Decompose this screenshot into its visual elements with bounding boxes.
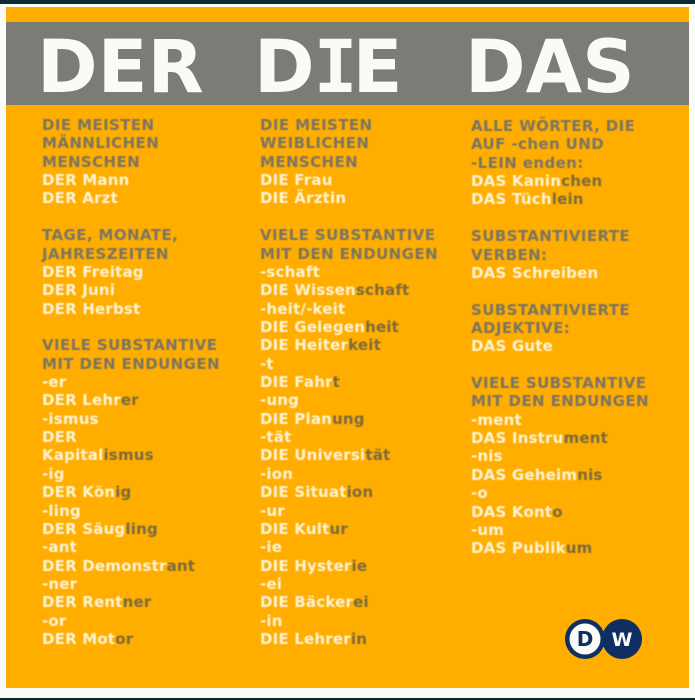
text block: -chen and -lein: [470, 116, 635, 208]
text block: masculine endings: DER: [42, 428, 77, 446]
text block: male people: DIE MEISTEN: [42, 116, 154, 134]
text block: masculine endings: DER Lehrer: [42, 391, 139, 409]
text block: neuter endings: -nis: [471, 447, 503, 465]
text block: female people: DIE Ärztin: [260, 189, 346, 207]
text block: feminine endings: -ur: [260, 502, 285, 520]
text block: days, months, seasons: JAHRESZEITEN: [42, 245, 169, 263]
text block: feminine endings: DIE Situation: [260, 483, 373, 501]
text block: feminine endings: DIE Kultur: [260, 520, 348, 538]
header band: [6, 22, 689, 105]
text block: -chen and -lein: DAS Kaninchen: [471, 172, 602, 190]
title: DAS: DAS: [465, 25, 635, 110]
text block: masculine endings: DER Rentner: [42, 593, 152, 611]
text block: masculine endings: [42, 336, 220, 648]
text block: neuter endings: VIELE SUBSTANTIVE: [471, 374, 646, 392]
text block: feminine endings: DIE Universität: [260, 446, 390, 464]
text block: neuter endings: MIT DEN ENDUNGEN: [471, 392, 649, 410]
text block: masculine endings: -ling: [42, 502, 81, 520]
text block: neuter endings: -o: [471, 484, 488, 502]
icon: DW logo: W: [612, 629, 633, 651]
text block: nominalised adjectives: ADJEKTIVE:: [471, 319, 570, 337]
text block: masculine endings: -ner: [42, 575, 77, 593]
text block: nominalised verbs: DAS Schreiben: [471, 264, 598, 282]
text block: nominalised adjectives: SUBSTANTIVIERTE: [471, 301, 630, 319]
text block: masculine endings: VIELE SUBSTANTIVE: [42, 336, 217, 354]
text block: days, months, seasons: DER Herbst: [42, 300, 140, 318]
text block: masculine endings: -or: [42, 612, 67, 630]
text block: feminine endings: -in: [260, 612, 283, 630]
icon: DW logo: D: [577, 627, 593, 651]
text block: masculine endings: DER König: [42, 483, 132, 501]
text block: days, months, seasons: DER Freitag: [42, 263, 144, 281]
text block: feminine endings: -ie: [260, 538, 282, 556]
text block: male people: MÄNNLICHEN: [42, 134, 159, 152]
panel: DAS column: [470, 116, 649, 557]
text block: nominalised verbs: [470, 227, 630, 282]
icon: DW logo: [565, 619, 642, 659]
text block: feminine endings: -t: [260, 355, 274, 373]
text block: feminine endings: [260, 226, 438, 648]
text block: feminine endings: -ung: [260, 391, 299, 409]
text block: female people: DIE MEISTEN: [260, 116, 372, 134]
text block: feminine endings: VIELE SUBSTANTIVE: [260, 226, 435, 244]
text block: male people: DER Mann: [42, 171, 129, 189]
text block: feminine endings: DIE Bäckerei: [260, 593, 369, 611]
text block: feminine endings: DIE Planung: [260, 410, 365, 428]
text block: feminine endings: -tät: [260, 428, 292, 446]
text block: feminine endings: DIE Wissenschaft: [260, 281, 409, 299]
text block: neuter endings: -ment: [471, 411, 522, 429]
text block: nominalised adjectives: [470, 301, 630, 355]
text block: female people: [260, 116, 372, 207]
text block: days, months, seasons: [40, 226, 178, 318]
text block: feminine endings: MIT DEN ENDUNGEN: [260, 245, 438, 263]
text block: feminine endings: DIE Fahrt: [260, 373, 340, 391]
panel: DIE column: [260, 116, 438, 648]
text block: male people: MENSCHEN: [42, 153, 140, 171]
text block: neuter endings: -um: [471, 521, 504, 539]
text block: feminine endings: DIE Heiterkeit: [260, 336, 381, 354]
text block: feminine endings: -heit/-keit: [260, 300, 345, 318]
text block: feminine endings: -schaft: [260, 263, 320, 281]
text block: feminine endings: DIE Lehrerin: [260, 630, 367, 648]
text block: nominalised verbs: SUBSTANTIVIERTE: [471, 227, 630, 245]
text block: masculine endings: DER Säugling: [42, 520, 158, 538]
text block: female people: DIE Frau: [260, 171, 333, 189]
text block: -chen and -lein: -LEIN enden:: [471, 154, 584, 172]
panel: DER column: [40, 116, 220, 648]
text block: masculine endings: DER Demonstrant: [42, 557, 195, 575]
text block: masculine endings: -er: [42, 373, 66, 391]
text block: neuter endings: [470, 374, 649, 557]
text block: feminine endings: -ei: [260, 575, 282, 593]
title: DER: DER: [37, 25, 204, 110]
bottom dark strip: [0, 698, 695, 700]
text block: -chen and -lein: DAS Tüchlein: [471, 190, 584, 208]
text block: masculine endings: DER Motor: [42, 630, 133, 648]
text block: female people: MENSCHEN: [260, 153, 358, 171]
text block: masculine endings: -ig: [42, 465, 65, 483]
text block: male people: DER Arzt: [42, 189, 118, 207]
text block: neuter endings: DAS Geheimnis: [471, 466, 603, 484]
text block: nominalised verbs: VERBEN:: [471, 246, 547, 264]
text block: nominalised adjectives: DAS Gute: [471, 337, 553, 355]
text block: days, months, seasons: DER Juni: [42, 281, 115, 299]
text block: masculine endings: MIT DEN ENDUNGEN: [42, 355, 220, 373]
text block: neuter endings: DAS Instrument: [471, 429, 608, 447]
text block: male people: [42, 116, 159, 207]
text block: feminine endings: DIE Hysterie: [260, 557, 367, 575]
text block: masculine endings: -ismus: [42, 410, 99, 428]
text block: neuter endings: DAS Konto: [471, 503, 563, 521]
text block: -chen and -lein: ALLE WÖRTER, DIE: [471, 117, 635, 135]
text block: -chen and -lein: AUF -chen UND: [471, 135, 604, 153]
text block: masculine endings: Kapitalismus: [42, 446, 154, 464]
text block: feminine endings: DIE Gelegenheit: [260, 318, 399, 336]
title: DIE: DIE: [254, 25, 402, 110]
text block: days, months, seasons: TAGE, MONATE,: [42, 226, 178, 244]
text block: neuter endings: DAS Publikum: [471, 539, 592, 557]
text block: masculine endings: -ant: [42, 538, 77, 556]
text block: female people: WEIBLICHEN: [260, 134, 369, 152]
top dark strip: [0, 0, 695, 4]
text block: feminine endings: -ion: [260, 465, 293, 483]
